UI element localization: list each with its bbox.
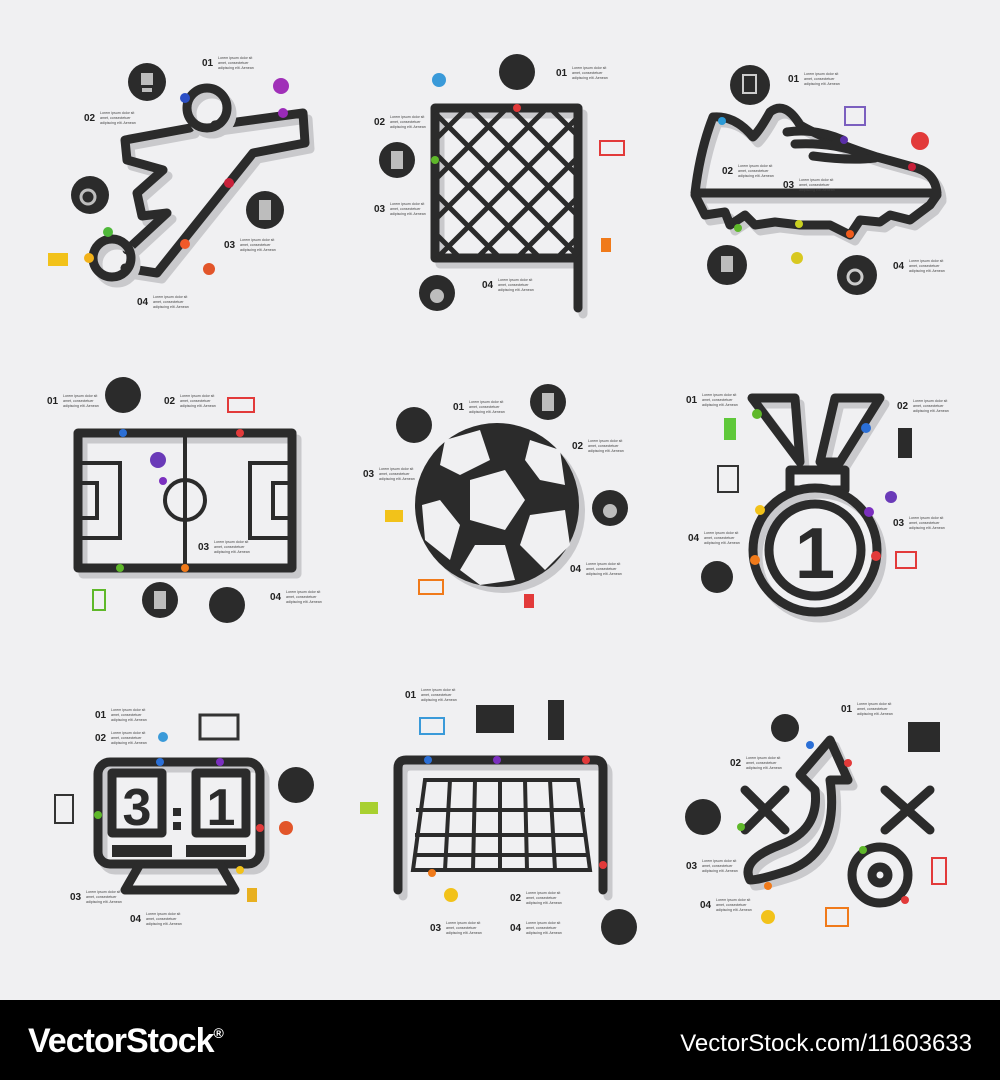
panel: goal xyxy=(360,688,637,945)
text blocks xyxy=(47,394,322,604)
board: 1 xyxy=(207,779,235,837)
text blocks xyxy=(686,393,949,545)
panel: scoreboard xyxy=(55,708,314,926)
player outline xyxy=(84,88,310,283)
text blocks: 04 xyxy=(893,261,905,272)
text blocks: 03 xyxy=(224,240,236,251)
panel: tactics xyxy=(685,702,946,926)
text blocks: 01 xyxy=(841,704,853,715)
icons xyxy=(360,700,637,945)
text blocks: 04 xyxy=(137,297,149,308)
text blocks: 01 xyxy=(788,74,800,85)
text blocks: 04 xyxy=(130,914,142,925)
text blocks: 02 xyxy=(510,893,522,904)
icons xyxy=(707,65,929,295)
text blocks: 02 xyxy=(572,441,584,452)
text blocks xyxy=(722,72,945,273)
text blocks xyxy=(84,56,276,309)
text blocks xyxy=(70,708,182,926)
text blocks: 02 xyxy=(897,401,909,412)
text blocks: 02 xyxy=(84,113,96,124)
text blocks xyxy=(374,66,608,292)
text blocks: 01 xyxy=(686,395,698,406)
board xyxy=(94,758,265,890)
icons xyxy=(379,54,624,311)
icons xyxy=(55,715,314,902)
text blocks: 02 xyxy=(730,758,742,769)
footer bar: VectorStock.com/11603633 xyxy=(680,1030,972,1057)
text blocks: 01 xyxy=(453,402,465,413)
text blocks: 01 xyxy=(95,710,107,721)
ball xyxy=(415,423,585,593)
text blocks xyxy=(363,400,624,576)
text blocks: 03 xyxy=(374,204,386,215)
panel: boot xyxy=(695,65,945,295)
medal outline: 1 xyxy=(795,514,835,594)
text blocks: 04 xyxy=(482,280,494,291)
medal outline xyxy=(750,398,885,618)
panel: medal xyxy=(686,393,949,618)
text blocks: 01 xyxy=(405,690,417,701)
text blocks: 03 xyxy=(70,892,82,903)
goal frame xyxy=(398,756,608,896)
tactics outline xyxy=(737,740,930,904)
text blocks: 04 xyxy=(570,564,582,575)
text blocks: 04 xyxy=(510,923,522,934)
text blocks: 03 xyxy=(783,180,795,191)
icons xyxy=(385,384,628,608)
panel: net flag xyxy=(374,54,624,314)
icons xyxy=(701,418,916,593)
text blocks: 01 xyxy=(202,58,214,69)
text blocks: 02 xyxy=(95,733,107,744)
text blocks: 02 xyxy=(164,396,176,407)
text blocks: 03 xyxy=(363,469,375,480)
footer bar: ® xyxy=(214,1025,225,1041)
boot outline xyxy=(695,108,942,241)
text blocks xyxy=(405,688,562,935)
footer bar xyxy=(0,1000,1000,1080)
footer bar: VectorStock xyxy=(28,1022,214,1060)
text blocks: 03 xyxy=(686,861,698,872)
text blocks: 03 xyxy=(893,518,905,529)
text blocks: 03 xyxy=(430,923,442,934)
text blocks: 02 xyxy=(374,117,386,128)
panel: kicking player xyxy=(48,56,310,309)
icons xyxy=(685,714,946,926)
text blocks: 02 xyxy=(722,166,734,177)
net frame xyxy=(431,104,583,314)
icons xyxy=(93,377,254,623)
text blocks: 01 xyxy=(47,396,59,407)
text blocks: 01 xyxy=(556,68,568,79)
text blocks xyxy=(686,702,893,912)
text blocks: 04 xyxy=(700,900,712,911)
icons xyxy=(48,63,289,275)
board: 3 xyxy=(123,779,151,837)
text blocks: 04 xyxy=(688,533,700,544)
panel: pitch xyxy=(47,377,322,623)
pitch outline xyxy=(78,429,297,574)
text blocks: 03 xyxy=(198,542,210,553)
panel: soccer ball xyxy=(363,384,628,608)
text blocks: 04 xyxy=(270,592,282,603)
